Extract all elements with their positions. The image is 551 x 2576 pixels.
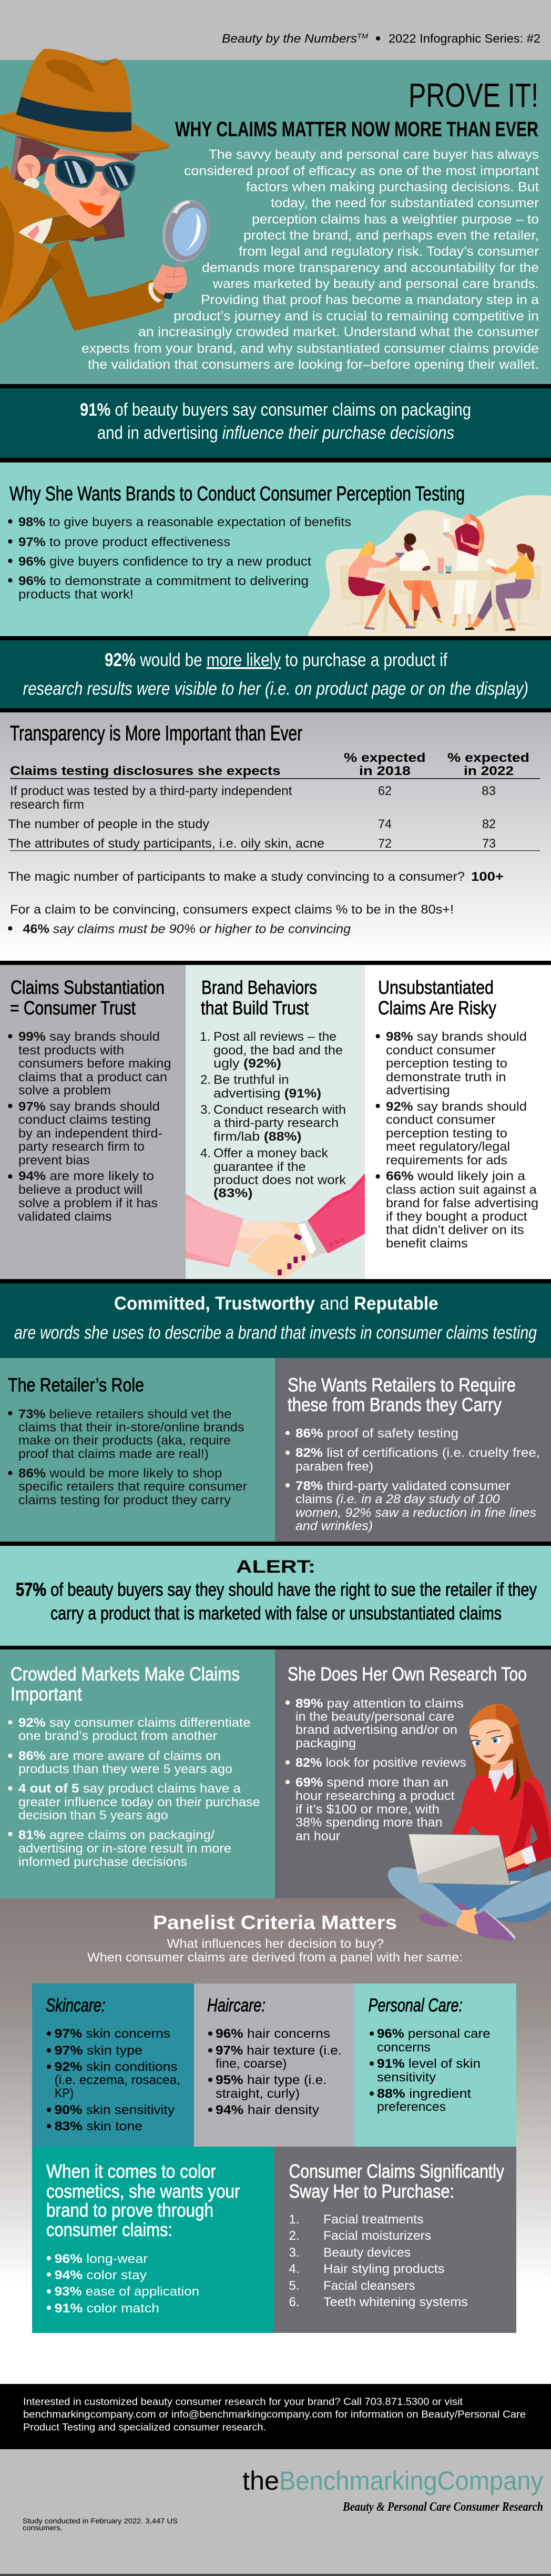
- box: personal care: concerns: [377, 2040, 431, 2055]
- column: unsubstantiated claims: conduct consumer: [386, 1043, 495, 1058]
- magic number text: [8, 870, 504, 937]
- series label: TM: [357, 32, 368, 40]
- column: brand behaviors: 4.: [200, 1146, 211, 1161]
- box: skincare: 97% skin type: [55, 2044, 142, 2058]
- series label: [222, 32, 540, 45]
- box: personal care: 88% ingredient: [377, 2087, 471, 2101]
- intro text: today, the need for substantiated consumer: [271, 196, 539, 210]
- bullet list: paraben free): [295, 1460, 373, 1474]
- bullet list: [285, 1696, 466, 1844]
- column: claims substantiation: consumers before making: [18, 1056, 171, 1071]
- column: claims substantiation: validated claims: [18, 1210, 112, 1224]
- bullet list: 82% list of certifications (i.e. cruelty free,: [295, 1446, 540, 1460]
- bullet list: [8, 1716, 260, 1869]
- column: claims substantiation: by an independent third-: [18, 1126, 162, 1141]
- bullet list: and wrinkles): [295, 1519, 373, 1533]
- column: brand behaviors: 1.: [200, 1030, 210, 1044]
- heading: Transparency is More Important than Ever: [10, 722, 302, 745]
- table: claims testing disclosures: [8, 751, 540, 851]
- box: color cosmetics: 91% color match: [55, 2301, 159, 2316]
- footer call to action: [0, 2384, 551, 2449]
- contact text: benchmarkingcompany.com or info@benchmarkingcompany.com for information on Beauty/Personal Care: [23, 2409, 526, 2420]
- intro text: perception claims has a weightier purpose – to: [252, 212, 539, 227]
- table: claims testing disclosures: in 2022: [464, 764, 514, 778]
- bullet list: 92% say consumer claims differentiate: [18, 1716, 251, 1730]
- bullet list: claims that their in-store/online brands: [18, 1421, 244, 1434]
- bullet list: 82% look for positive reviews: [295, 1756, 466, 1770]
- banner text: [23, 650, 528, 699]
- study note: Study conducted in February 2022. 3,447 US: [23, 2517, 178, 2525]
- intro text: from legal and regulatory risk. Today’s consumer: [239, 244, 539, 259]
- heading: [288, 1374, 516, 1415]
- column: unsubstantiated claims: Unsubstantiated: [378, 977, 494, 998]
- box: color cosmetics: brand to prove through: [46, 2199, 213, 2221]
- bullet list: 4 out of 5 say product claims have a: [18, 1782, 241, 1796]
- bullet list: packaging: [295, 1736, 356, 1750]
- column: brand behaviors: Conduct research with: [213, 1103, 346, 1117]
- heading: [11, 1663, 240, 1705]
- box: haircare: fine, coarse): [216, 2057, 287, 2071]
- column: brand behaviors: firm/lab (88%): [213, 1130, 302, 1144]
- bullet list: in the beauty/personal care: [295, 1710, 454, 1724]
- column: brand behaviors: (83%): [213, 1186, 253, 1201]
- box: skincare: KP): [55, 2086, 74, 2100]
- column: unsubstantiated claims: meet regulatory/legal: [386, 1140, 510, 1154]
- heading: these from Brands they Carry: [288, 1394, 502, 1415]
- box: haircare: 96% hair concerns: [216, 2027, 330, 2041]
- bullet list: 98% to give buyers a reasonable expectation of benefits: [18, 515, 351, 529]
- box: consumer claims sway her: 5.: [289, 2279, 300, 2293]
- column: unsubstantiated claims: brand for false advertising: [386, 1196, 538, 1210]
- magic number text: 100+: [471, 870, 504, 884]
- column: claims substantiation: test products with: [18, 1043, 124, 1058]
- bullet list: one brand’s product from another: [18, 1729, 217, 1743]
- contact text: [23, 2397, 526, 2433]
- box: skincare: 97% skin concerns: [55, 2027, 170, 2041]
- box: consumer claims sway her: Facial moisturizers: [323, 2229, 431, 2243]
- heading: She Wants Retailers to Require: [288, 1374, 516, 1395]
- table: claims testing disclosures: 62: [378, 784, 392, 798]
- intro text: [81, 147, 539, 372]
- box: skincare: Skincare:: [46, 1995, 105, 2016]
- column: unsubstantiated claims: 66% would likely join a: [386, 1169, 526, 1183]
- banner text: [80, 400, 471, 443]
- bullet list: an hour: [295, 1829, 340, 1844]
- bullet list: proof that claims made are real!): [18, 1447, 209, 1461]
- bullet list: 97% to prove product effectiveness: [18, 535, 230, 549]
- intro text: expects from your brand, and why substantiated consumer claims provide: [81, 341, 539, 356]
- box: consumer claims sway her: Beauty devices: [323, 2246, 411, 2260]
- table: claims testing disclosures: in 2018: [359, 764, 411, 778]
- intro text: considered proof of efficacy as one of the most important: [184, 164, 539, 178]
- bullet list: brand advertising and/or on: [295, 1723, 457, 1737]
- alert text: [16, 1579, 537, 1624]
- box: consumer claims sway her: 2.: [289, 2229, 300, 2243]
- bullet list: products than they were 5 years ago: [18, 1762, 232, 1776]
- column: brand behaviors: Be truthful in: [213, 1073, 289, 1087]
- panel: panelist criteria: [0, 1898, 551, 2384]
- bullet list: greater influence today on their purchase: [18, 1795, 260, 1809]
- banner text: Committed, Trustworthy and Reputable: [114, 1293, 438, 1314]
- column: brand behaviors: advertising (91%): [213, 1086, 321, 1101]
- banner text: 91% of beauty buyers say consumer claims on packaging: [80, 400, 471, 420]
- person 4: [517, 547, 525, 557]
- table: claims testing disclosures: Claims testing disclosures she expects: [10, 764, 281, 778]
- panel: transparency: [0, 712, 551, 961]
- person 1: [369, 545, 375, 556]
- heading: Panelist Criteria Matters: [153, 1912, 397, 1933]
- table: claims testing disclosures: 83: [482, 784, 496, 798]
- column: claims substantiation: Claims Substantiation: [11, 977, 165, 998]
- magic number text: 46% say claims must be 90% or higher to be convincing: [23, 922, 351, 937]
- header bar: [0, 0, 551, 60]
- banner: committed trustworthy reputable: [0, 1279, 551, 1358]
- box: consumer claims sway her: Facial cleansers: [323, 2279, 415, 2293]
- box: haircare: Haircare:: [207, 1995, 266, 2016]
- column: claims substantiation: [0, 965, 186, 1279]
- subheading: What influences her decision to buy?: [167, 1937, 384, 1951]
- box: consumer claims sway her: 3.: [289, 2246, 300, 2260]
- heading: Important: [11, 1683, 82, 1705]
- box: consumer claims sway her: Sway Her to Purchase:: [289, 2180, 454, 2202]
- contact text: Product Testing and specialized consumer research.: [23, 2422, 266, 2433]
- panel: three trust columns: [0, 961, 551, 1279]
- box: personal care: sensitivity: [377, 2070, 436, 2085]
- panel: why she wants brands to conduct testing: [0, 462, 551, 636]
- column: unsubstantiated claims: perception testing to: [386, 1056, 507, 1071]
- column: brand behaviors: [186, 965, 365, 1279]
- column: claims substantiation: prevent bias: [18, 1153, 89, 1168]
- heading: Crowded Markets Make Claims: [11, 1663, 240, 1685]
- column: brand behaviors: ugly (92%): [213, 1056, 281, 1071]
- bullet list: decision than 5 years ago: [18, 1808, 168, 1823]
- bullet list: claims testing for product they carry: [18, 1493, 231, 1507]
- table: claims testing disclosures: If product was tested by a third-party independent: [10, 784, 292, 798]
- column: brand behaviors: good, the bad and the: [213, 1043, 343, 1058]
- subheading: When consumer claims are derived from a panel with her same:: [87, 1950, 463, 1965]
- panel: she does her own research: [275, 1649, 551, 1898]
- intro text: an increasingly crowded market. Understand what the consumer: [138, 325, 539, 339]
- icon: handshake: [186, 1173, 365, 1279]
- table: claims testing disclosures: research firm: [10, 798, 84, 812]
- column: unsubstantiated claims: 92% say brands should: [386, 1100, 527, 1114]
- bullet list: advertising or in-store result in more: [18, 1842, 231, 1856]
- box: haircare: straight, curly): [216, 2087, 300, 2101]
- column: claims substantiation: 94% are more likely to: [18, 1169, 154, 1183]
- bullet list: 73% believe retailers should vet the: [18, 1407, 231, 1422]
- bullet list: 86% would be more likely to shop: [18, 1466, 222, 1481]
- banner: 91% of beauty buyers: [0, 384, 551, 462]
- column: brand behaviors: Offer a money back: [213, 1146, 329, 1161]
- box: haircare: 94% hair density: [216, 2103, 319, 2117]
- study note: consumers.: [23, 2523, 63, 2532]
- banner text: 92% would be more likely to purchase a product if: [105, 650, 447, 670]
- column: brand behaviors: Brand Behaviors: [201, 977, 317, 998]
- series label: 2022 Infographic Series: #2: [389, 32, 540, 45]
- icon: woman with laptop: [388, 1704, 551, 1940]
- icon: detective with magnifying glass: [0, 49, 217, 331]
- column: claims substantiation: conduct claims testing: [18, 1113, 151, 1127]
- box: color cosmetics: When it comes to color: [46, 2160, 216, 2182]
- logo: the: [242, 2466, 279, 2496]
- column: unsubstantiated claims: demonstrate truth in: [386, 1070, 506, 1084]
- magic number text: The magic number of participants to make a study convincing to a consumer?: [8, 870, 465, 884]
- column: unsubstantiated claims: if they bought a product: [386, 1210, 527, 1224]
- box: consumer claims sway her: 6.: [289, 2295, 300, 2309]
- box: haircare: 97% hair texture (i.e.: [216, 2044, 342, 2058]
- study note: [23, 2517, 178, 2532]
- table: claims testing disclosures: 72: [378, 837, 392, 851]
- column: claims substantiation: = Consumer Trust: [10, 997, 136, 1019]
- column: unsubstantiated claims: benefit claims: [386, 1236, 468, 1251]
- box: skincare: 83% skin tone: [55, 2119, 142, 2134]
- panel: the retailer's role: [0, 1358, 275, 1542]
- panel: alert: [0, 1542, 551, 1649]
- bullet list: 78% third-party validated consumer: [295, 1479, 511, 1493]
- table: claims testing disclosures: % expected: [447, 751, 529, 765]
- column: brand behaviors: a third-party research: [213, 1116, 339, 1130]
- box: consumer claims sway her: [274, 2147, 516, 2333]
- contact text: Interested in customized beauty consumer research for your brand? Call 703.871.5300 or visit: [23, 2397, 463, 2408]
- box: personal care: [354, 1984, 516, 2147]
- table: claims testing disclosures: 82: [482, 817, 496, 831]
- box: color cosmetics: 96% long-wear: [55, 2252, 148, 2266]
- intro text: demands more transparency and accountability for the: [202, 260, 539, 275]
- bullet list: specific retailers that require consumer: [18, 1480, 247, 1494]
- bullet list: 86% are more aware of claims on: [18, 1749, 221, 1763]
- banner text: [14, 1293, 537, 1343]
- column: claims substantiation: claims that a product can: [18, 1070, 167, 1084]
- intro text: protect the brand, and perhaps even the retailer,: [243, 228, 539, 243]
- box: haircare: [194, 1984, 354, 2147]
- banner text: and in advertising influence their purchase decisions: [97, 423, 454, 443]
- box: skincare: [32, 1984, 194, 2147]
- intro text: factors when making purchasing decisions. But: [246, 180, 539, 195]
- box: color cosmetics: [32, 2147, 274, 2333]
- bullet list: make on their products (aka, require: [18, 1433, 231, 1448]
- box: personal care: 91% level of skin: [377, 2057, 481, 2071]
- box: consumer claims sway her: Hair styling products: [323, 2262, 445, 2276]
- series label: Beauty by the Numbers: [222, 32, 358, 45]
- bullet list: [8, 515, 351, 602]
- bullet list: [8, 1407, 247, 1507]
- panel: crowded markets: [0, 1649, 275, 1898]
- column: brand behaviors: guarantee if the: [213, 1160, 306, 1174]
- icon: women around a table: [308, 495, 551, 636]
- box: personal care: preferences: [377, 2100, 446, 2114]
- bullet list: 89% pay attention to claims: [295, 1696, 464, 1711]
- box: color cosmetics: cosmetics, she wants your: [46, 2180, 240, 2202]
- column: unsubstantiated claims: requirements for ads: [386, 1153, 507, 1168]
- bullet list: if it’s $100 or more, with: [295, 1803, 440, 1816]
- column: claims substantiation: believe a product will: [18, 1183, 142, 1197]
- person 3: [464, 514, 484, 554]
- bullet list: products that work!: [18, 588, 134, 602]
- box: skincare: 90% skin sensitivity: [55, 2103, 175, 2117]
- box: skincare: 92% skin conditions: [55, 2060, 178, 2074]
- column: unsubstantiated claims: class action suit against a: [386, 1183, 537, 1197]
- bullet list: 96% to demonstrate a commitment to delivering: [18, 574, 309, 588]
- box: consumer claims sway her: Facial treatments: [323, 2212, 424, 2227]
- box: consumer claims sway her: Teeth whitening systems: [323, 2295, 468, 2309]
- column: brand behaviors: 2.: [200, 1073, 211, 1087]
- magic number text: For a claim to be convincing, consumers expect claims % to be in the 80s+!: [10, 903, 454, 917]
- box: color cosmetics: 94% color stay: [55, 2268, 147, 2282]
- footer branding: [0, 2449, 551, 2576]
- table: claims testing disclosures: The attributes of study participants, i.e. oily skin, acne: [8, 837, 324, 851]
- bullet list: [285, 1426, 540, 1533]
- intro text: wares marketed by beauty and personal care brands.: [212, 277, 539, 291]
- bullet list: 69% spend more than an: [295, 1775, 448, 1790]
- column: claims substantiation: party research firm to: [18, 1140, 145, 1154]
- intro text: The savvy beauty and personal care buyer has always: [209, 147, 539, 162]
- title: [175, 76, 538, 141]
- table: claims testing disclosures: The number of people in the study: [8, 817, 209, 831]
- banner: 92% more likely to purchase: [0, 636, 551, 712]
- column: unsubstantiated claims: [376, 977, 538, 1251]
- alert heading: ALERT:: [236, 1557, 315, 1577]
- box: consumer claims sway her: Consumer Claims Significantly: [289, 2160, 504, 2182]
- panel: intro: [0, 60, 551, 384]
- bullet list: 38% spending more than: [295, 1815, 443, 1830]
- table: claims testing disclosures: % expected: [344, 751, 426, 765]
- table: claims testing disclosures: 74: [378, 817, 392, 831]
- bullet list: 96% give buyers confidence to try a new product: [18, 555, 311, 569]
- box: consumer claims sway her: 1.: [289, 2212, 300, 2227]
- bullet list: claims (i.e. in a 28 day study of 100: [295, 1492, 500, 1506]
- column: unsubstantiated claims: perception testing to: [386, 1126, 507, 1141]
- intro text: Providing that proof has become a mandatory step in a: [201, 293, 539, 307]
- column: claims substantiation: solve a problem if it has: [18, 1196, 158, 1210]
- box: color cosmetics: 93% ease of application: [55, 2285, 199, 2299]
- intro text: the validation that consumers are looking for–before opening their wallet.: [88, 357, 539, 372]
- intro text: product’s journey and is crucial to remaining competitive in: [174, 309, 539, 324]
- column: claims substantiation: 97% say brands should: [18, 1100, 160, 1114]
- bullet list: hour researching a product: [295, 1789, 455, 1803]
- column: unsubstantiated claims: that didn’t deliver on its: [386, 1223, 524, 1237]
- bullet list: 81% agree claims on packaging/: [18, 1828, 215, 1843]
- box: personal care: Personal Care:: [368, 1995, 463, 2016]
- column: brand behaviors: Post all reviews – the: [213, 1030, 336, 1044]
- column: unsubstantiated claims: 98% say brands should: [386, 1030, 527, 1044]
- box: color cosmetics: consumer claims:: [46, 2219, 172, 2240]
- box: consumer claims sway her: 4.: [289, 2262, 300, 2276]
- subheading: [87, 1937, 463, 1965]
- bullet list: informed purchase decisions: [18, 1855, 187, 1869]
- column: brand behaviors: product does not work: [213, 1173, 346, 1188]
- column: unsubstantiated claims: Claims Are Risky: [378, 997, 496, 1019]
- box: haircare: 95% hair type (i.e.: [216, 2073, 327, 2087]
- column: unsubstantiated claims: advertising: [386, 1083, 450, 1098]
- column: brand behaviors: that Build Trust: [201, 997, 309, 1019]
- heading: The Retailer’s Role: [8, 1374, 144, 1395]
- box: personal care: 96% personal care: [377, 2027, 490, 2041]
- column: unsubstantiated claims: conduct consumer: [386, 1113, 495, 1127]
- person 2: [404, 534, 416, 545]
- bullet list: women, 92% saw a reduction in fine lines: [295, 1506, 536, 1520]
- panel: she wants retailers to require: [275, 1358, 551, 1542]
- column: claims substantiation: 99% say brands should: [18, 1030, 160, 1044]
- table: claims testing disclosures: 73: [482, 837, 496, 851]
- box: skincare: (i.e. eczema, rosacea,: [55, 2073, 180, 2087]
- column: brand behaviors: 3.: [200, 1103, 211, 1117]
- column: claims substantiation: solve a problem: [18, 1083, 111, 1098]
- bullet list: 86% proof of safety testing: [295, 1426, 458, 1441]
